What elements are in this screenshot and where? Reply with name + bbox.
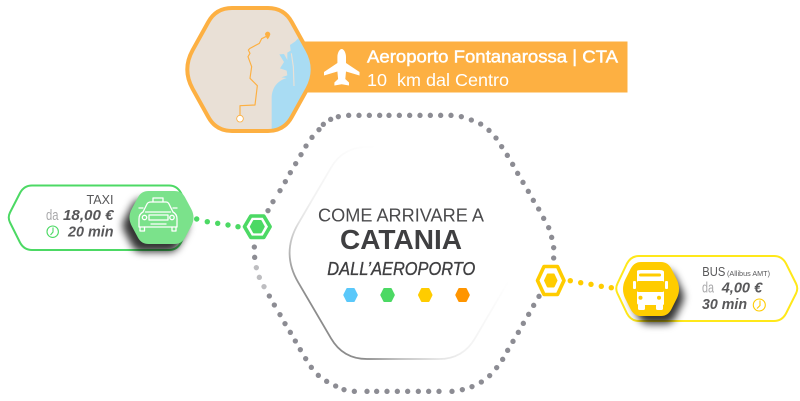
icon: airplane [324,49,360,86]
taxi label: TAXI [86,193,114,207]
bus connector dots [568,278,614,290]
taxi hexagon [130,191,194,244]
bus hexagon shadow [630,270,684,324]
title line 3: DALL’AEROPORTO [327,258,475,279]
dotted hexagon ring [252,113,556,394]
map water [272,38,311,129]
bus operator: (Allibus AMT) [727,269,770,278]
taxi price from: da [46,208,59,224]
taxi card [9,186,194,252]
central hexagon title panel [290,147,516,359]
bus node hexagon [538,266,564,294]
airport banner [300,42,628,92]
bus price: 4,00 € [721,280,763,297]
taxi connector dots [194,216,241,229]
colour hexagon dots [344,289,469,301]
map route [237,32,270,122]
bus label: BUS [702,265,725,279]
icon: bus [633,270,668,310]
bus hexagon [623,262,679,316]
icon: taxi car [139,198,177,231]
bus time: 30 min [702,296,747,313]
bus card [616,256,797,324]
icon: taxi clock [47,226,58,237]
title line 2: CATANIA [340,224,462,255]
taxi hexagon shadow [123,199,188,252]
icon: bus clock [753,299,765,311]
bus price from: da [702,281,715,297]
taxi price: 18,00 € [63,207,114,224]
map hexagon [187,8,320,133]
taxi time: 20 min [67,224,114,241]
taxi node hexagon [244,216,270,237]
banner distance: 10 km dal Centro [367,70,509,90]
banner title: Aeroporto Fontanarossa | CTA [367,47,618,67]
title line 1: COME ARRIVARE A [318,205,485,226]
